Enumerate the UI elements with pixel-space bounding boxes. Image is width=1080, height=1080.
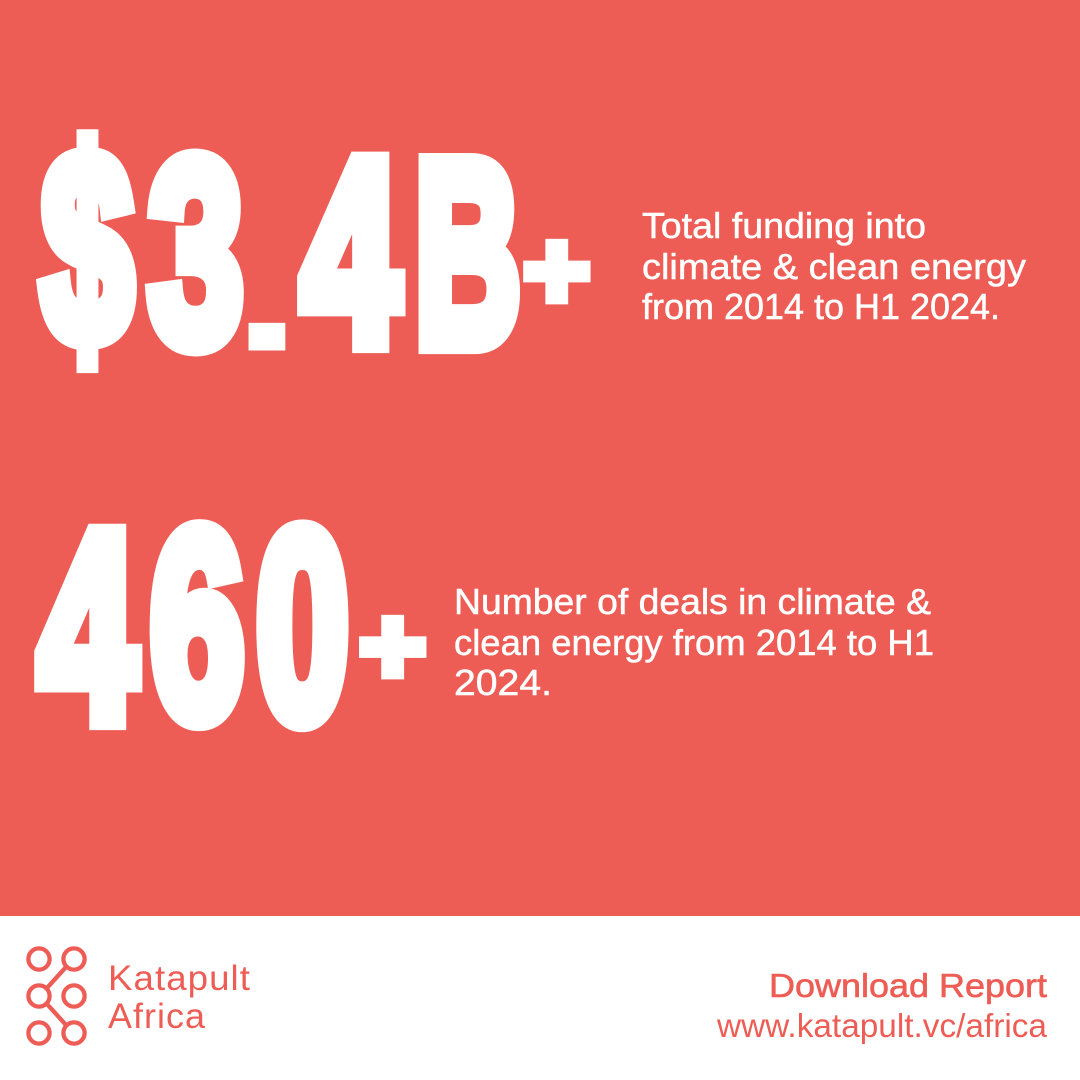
big number: 460+: 6 xyxy=(150,475,244,775)
big number: $3.4B+: . xyxy=(251,268,283,361)
call to action: download report link xyxy=(716,967,1048,1044)
logo wordmark: Katapult Africa xyxy=(108,959,251,1036)
icon: Katapult network logo xyxy=(28,948,85,1044)
text block: total funding description: climate & clean energy xyxy=(642,246,1026,287)
text block: total funding description: from 2014 to H1 2024. xyxy=(642,286,1000,327)
big number: 460+: 0 xyxy=(256,475,349,777)
big number: $3.4B+ xyxy=(42,96,590,400)
big number: 460+: 4 xyxy=(38,477,136,777)
text block: number of deals description: 2024. xyxy=(454,662,552,703)
text block: number of deals description: Number of deals in climate & xyxy=(454,581,931,622)
big number: $3.4B+: 4 xyxy=(302,107,399,399)
panel: white footer xyxy=(0,916,1080,1080)
text block: number of deals description xyxy=(454,581,934,703)
logo wordmark: Katapult Africa: Katapult xyxy=(108,959,251,998)
big number: 460+: + xyxy=(359,585,426,706)
big number: 460+ xyxy=(38,475,426,777)
logo wordmark: Katapult Africa: Africa xyxy=(108,997,206,1036)
big number: $3.4B+: + xyxy=(524,209,590,332)
text block: number of deals description: clean energy from 2014 to H1 xyxy=(454,622,934,663)
text block: total funding description xyxy=(642,205,1026,327)
big number: $3.4B+: B xyxy=(415,107,520,398)
big number: $3.4B+: $ xyxy=(42,96,133,400)
text block: total funding description: Total funding into xyxy=(642,205,926,246)
big number: $3.4B+: 3 xyxy=(148,105,243,399)
call to action: download report link: Download Report xyxy=(769,967,1047,1004)
call to action: download report link: www.katapult.vc/africa xyxy=(716,1007,1048,1044)
